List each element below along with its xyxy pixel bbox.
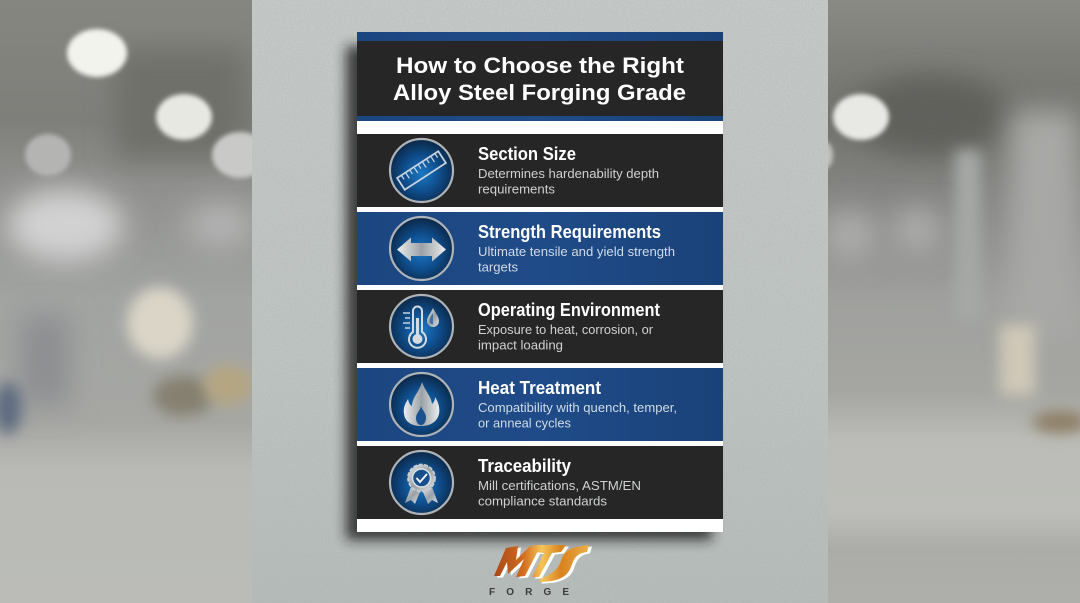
row: traceability (357, 446, 723, 519)
text: section size (478, 144, 659, 196)
poster drop shadow (346, 46, 712, 540)
text: operating environment: Operating Environment (478, 300, 660, 320)
text: traceability: compliance standards (478, 494, 607, 508)
icon: flame (390, 373, 453, 436)
text: strength requirements: targets (478, 260, 518, 274)
text: heat treatment (478, 378, 677, 430)
row: strength requirements (357, 212, 723, 285)
row: heat treatment (357, 368, 723, 441)
text: operating environment (478, 300, 660, 352)
wall panel (252, 0, 828, 603)
text: traceability: Mill certifications, ASTM/EN (478, 478, 641, 493)
text: section size: requirements (478, 182, 555, 196)
poster header (357, 32, 723, 121)
icon: thermometer and droplet (390, 295, 453, 358)
text: section size: Section Size (478, 144, 576, 164)
text: section size: Determines hardenability depth (478, 166, 659, 181)
icon: certification badge (390, 451, 453, 514)
title: Alloy Steel Forging Grade (393, 80, 686, 105)
row: section size (357, 134, 723, 207)
text: strength requirements: Ultimate tensile and yield strength (478, 244, 675, 259)
text: heat treatment: Compatibility with quench, temper, (478, 400, 677, 415)
text: traceability: Traceability (478, 456, 571, 476)
title (393, 53, 686, 105)
icon: ruler (390, 139, 453, 202)
icon: double arrow (390, 217, 453, 280)
text: heat treatment: Heat Treatment (478, 378, 601, 398)
text: operating environment: Exposure to heat, corrosion, or (478, 322, 654, 337)
text: traceability (478, 456, 641, 508)
text: strength requirements (478, 222, 675, 274)
text: strength requirements: Strength Requirements (478, 222, 661, 242)
title: How to Choose the Right (396, 53, 685, 78)
logo: MTS Forge (489, 545, 592, 598)
poster (357, 32, 723, 532)
text: heat treatment: or anneal cycles (478, 416, 571, 430)
logo mark (494, 545, 592, 584)
text: operating environment: impact loading (478, 338, 563, 352)
logo wordmark: FORGE (489, 587, 569, 598)
row: operating environment (357, 290, 723, 363)
